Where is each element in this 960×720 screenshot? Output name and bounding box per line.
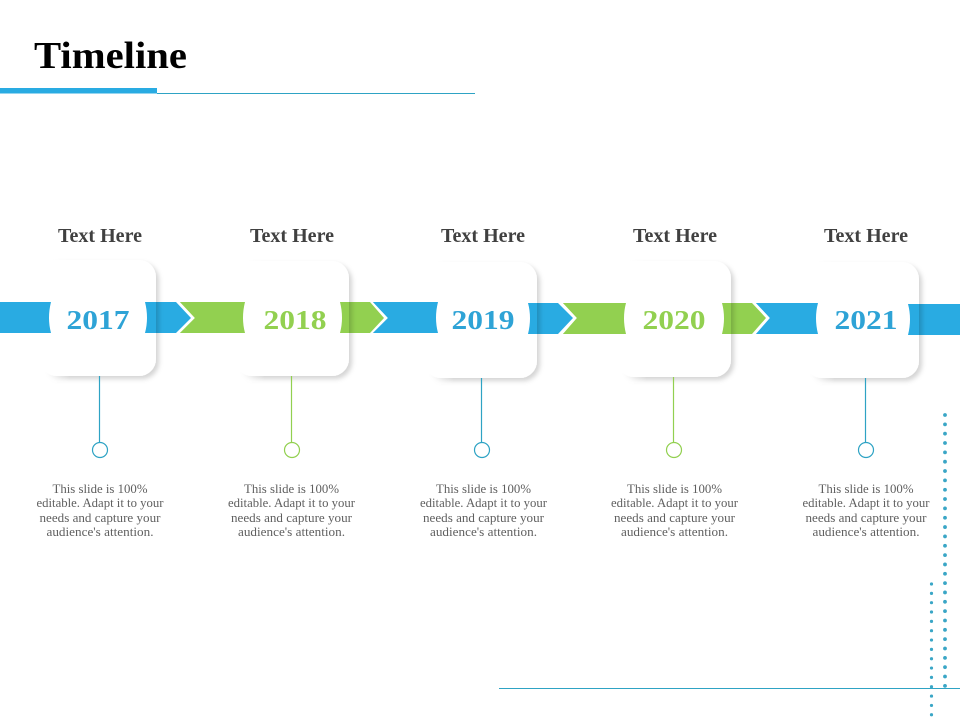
heading 3: Text Here bbox=[441, 226, 525, 247]
year 2019: 2019 bbox=[452, 304, 514, 335]
text block 1: editable. Adapt it to your bbox=[36, 496, 164, 510]
text block 2 bbox=[228, 482, 356, 539]
arrow band segments bbox=[0, 302, 960, 335]
title: Timeline bbox=[34, 35, 187, 77]
heading 5: Text Here bbox=[824, 226, 908, 247]
bottom rule bbox=[499, 688, 960, 689]
text block 5: This slide is 100% bbox=[818, 482, 914, 496]
text block 4: audience's attention. bbox=[621, 525, 728, 539]
heading 2: Text Here bbox=[250, 226, 334, 247]
text block 1: This slide is 100% bbox=[52, 482, 148, 496]
heading 4: Text Here bbox=[633, 226, 717, 247]
card 2019 bbox=[373, 256, 537, 384]
text block 2: This slide is 100% bbox=[244, 482, 339, 496]
text block 3: editable. Adapt it to your bbox=[420, 496, 548, 510]
text block 4 bbox=[611, 482, 739, 539]
card 2017 bbox=[0, 254, 156, 382]
text block 1: needs and capture your bbox=[40, 511, 161, 525]
year 2017: 2017 bbox=[66, 304, 130, 335]
text block 5: needs and capture your bbox=[806, 511, 927, 525]
year 2018: 2018 bbox=[264, 304, 326, 335]
heading 1: Text Here bbox=[58, 226, 142, 247]
connector 5 bbox=[858, 378, 874, 458]
text block 4: This slide is 100% bbox=[627, 482, 722, 496]
text block 3 bbox=[420, 482, 548, 539]
connector 2 bbox=[284, 376, 300, 458]
connector 1 bbox=[92, 376, 108, 458]
text block 1: audience's attention. bbox=[46, 525, 154, 539]
connector 3 bbox=[474, 378, 490, 458]
year 2021: 2021 bbox=[834, 304, 898, 335]
text block 5: editable. Adapt it to your bbox=[802, 496, 930, 510]
text block 3: This slide is 100% bbox=[436, 482, 531, 496]
card 2020 bbox=[563, 255, 731, 383]
text block 1 bbox=[36, 482, 164, 539]
text block 3: needs and capture your bbox=[423, 511, 545, 525]
text block 5: audience's attention. bbox=[812, 525, 920, 539]
card 2021 bbox=[756, 256, 919, 384]
text block 2: editable. Adapt it to your bbox=[228, 496, 356, 510]
text block 4: editable. Adapt it to your bbox=[611, 496, 739, 510]
card 2018 bbox=[180, 255, 349, 382]
title underline bbox=[0, 88, 475, 94]
year 2020: 2020 bbox=[642, 304, 706, 335]
text block 4: needs and capture your bbox=[614, 511, 736, 525]
text block 2: needs and capture your bbox=[231, 511, 353, 525]
text block 2: audience's attention. bbox=[238, 525, 345, 539]
text block 5 bbox=[802, 482, 930, 539]
dotted lines bbox=[932, 415, 945, 716]
text block 3: audience's attention. bbox=[430, 525, 537, 539]
connector 4 bbox=[666, 377, 682, 458]
